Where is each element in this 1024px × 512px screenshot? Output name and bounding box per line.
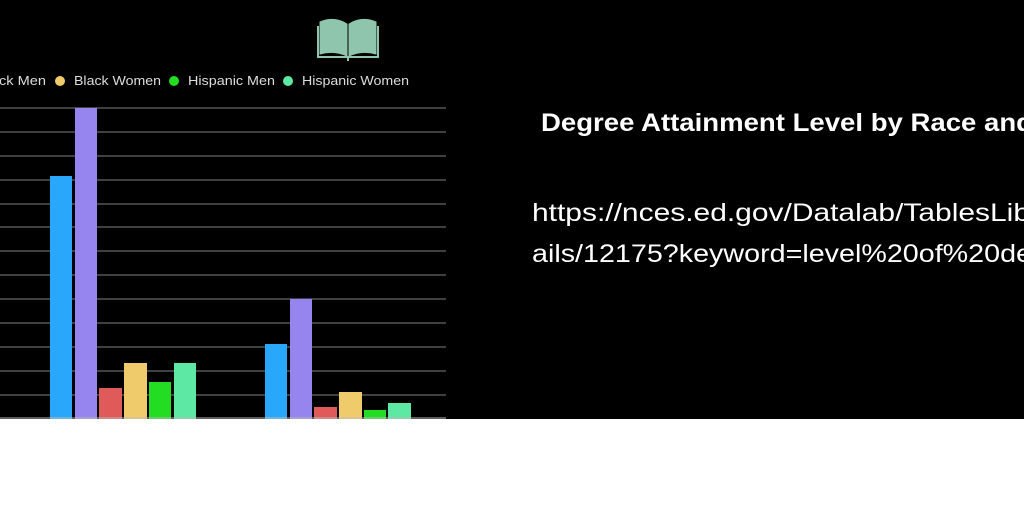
icon: open book [318, 19, 378, 61]
bar chart: group 1 [50, 108, 196, 419]
legend: Black Women [74, 73, 161, 88]
legend: ck Men [0, 73, 46, 88]
title: Degree Attainment Level by Race and [541, 109, 1024, 137]
source url [532, 199, 1024, 268]
source url: https://nces.ed.gov/Datalab/TablesLib [532, 199, 1024, 227]
source url: ails/12175?keyword=level%20of%20de [532, 240, 1024, 268]
legend: Hispanic Women [302, 73, 409, 88]
legend: Hispanic Men [188, 73, 275, 88]
bar chart: group 2 [265, 299, 411, 419]
legend [0, 73, 409, 88]
